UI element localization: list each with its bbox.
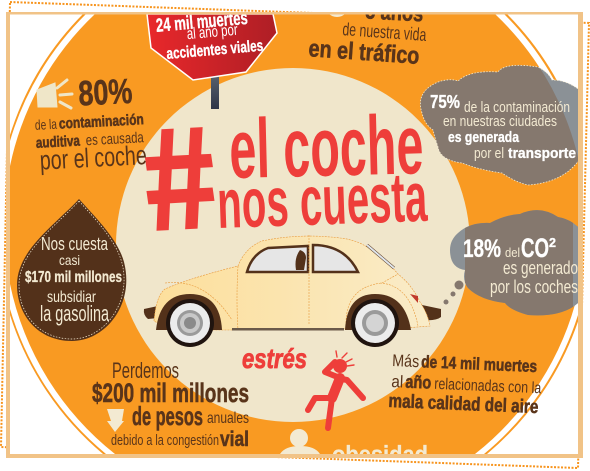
stress label: estrés: [242, 343, 307, 374]
central cream circle: [116, 68, 470, 422]
clock icon: [330, 14, 344, 17]
rear wheel arch: [345, 294, 411, 330]
cloud over white: [420, 65, 585, 185]
octagon: [147, 14, 277, 80]
air quality text: mala calidad del aire: [388, 391, 539, 418]
noise text: auditiva: [35, 133, 81, 152]
cloud: 18 percent: 2: [549, 235, 556, 250]
icon: person: [290, 429, 308, 447]
noise text: por el coche: [39, 140, 147, 176]
cloud: 75 percent: [420, 65, 585, 185]
air quality text: [388, 351, 543, 418]
obesity section: [280, 429, 428, 469]
congestion text: anuales: [207, 410, 249, 427]
icon: down arrow: [107, 409, 124, 432]
noise text: de la: [34, 116, 57, 133]
drop shape: [17, 199, 126, 341]
gasoline drop: [17, 199, 126, 341]
car: [144, 235, 441, 347]
front wheel: [166, 299, 214, 347]
cloud: 75 percent: por el: [474, 145, 504, 162]
cloud shape: [420, 65, 585, 185]
sign pole: [211, 76, 219, 109]
sign text: 24 mil muertes: [155, 8, 249, 37]
gasoline drop: subsidiar: [47, 289, 97, 306]
el coche: el coche: [228, 97, 424, 196]
cloud: 75 percent: transporte: [508, 145, 576, 162]
tail light: [410, 294, 418, 303]
cloud stitching: [420, 65, 585, 185]
icon: megaphone: [37, 80, 72, 108]
back glass: [367, 245, 394, 268]
gasoline drop: casi: [59, 252, 80, 268]
cloud text: 75%: [430, 92, 460, 112]
stop sign: [147, 7, 277, 109]
hash symbol: #: [133, 96, 226, 260]
noise stat: [35, 78, 146, 176]
years in traffic: [309, 14, 426, 64]
cloud edge: [450, 210, 585, 315]
rear window: [313, 245, 358, 272]
air quality text: año: [405, 372, 432, 393]
cloud shape: [465, 210, 573, 316]
congestion text: [92, 358, 249, 451]
sign text: [156, 14, 263, 60]
cloud text: 18%: [463, 235, 501, 263]
door and fender lines: [165, 235, 418, 330]
rear wheel: [351, 299, 399, 347]
car body: [154, 236, 430, 330]
cloud: 18 percent: del: [505, 245, 520, 260]
noise text: es causada: [85, 129, 145, 149]
years in traffic: en el tráfico: [308, 35, 420, 70]
smoke puffs: [444, 280, 464, 304]
congestion text: $200 mil millones: [92, 378, 249, 408]
driver silhouette: [296, 250, 306, 270]
air quality text: al: [391, 372, 404, 391]
noise text: 80%: [77, 72, 133, 114]
noise text: contaminación: [58, 111, 144, 133]
cloud: 18 percent: [450, 210, 585, 315]
sign text: al año por: [186, 22, 239, 43]
rear bumper: [422, 305, 441, 320]
congestion text: debido a la congestión: [111, 432, 219, 449]
title: [145, 114, 428, 231]
congestion text: Perdemos: [112, 358, 179, 383]
icon: stressed person: [308, 351, 363, 428]
cloud: 75 percent: en nuestras ciudades: [443, 113, 557, 130]
congestion text: vial: [220, 428, 249, 451]
front window: [247, 246, 308, 272]
drop text: Nos cuesta: [41, 234, 109, 254]
gasoline drop: la gasolina: [40, 301, 110, 326]
congestion text: de pesos: [132, 401, 203, 431]
obesity text: obesidad: [332, 441, 428, 469]
air quality text: Más: [392, 351, 420, 371]
noise text: [35, 78, 146, 176]
cloud: 75 percent: es generada: [448, 129, 520, 146]
years text: de nuestra vida: [342, 19, 428, 45]
air quality text: de 14 mil muertes: [421, 352, 538, 376]
gasoline drop: $170 mil millones: [25, 269, 122, 286]
front wheel arch: [156, 294, 222, 330]
front bumper: [144, 306, 158, 319]
cloud: 18 percent: CO: [521, 233, 549, 263]
nos cuesta: nos cuesta: [216, 158, 429, 243]
running board: [232, 328, 344, 330]
sign text: accidentes viales: [166, 38, 264, 63]
air quality text: relacionadas con la: [434, 376, 542, 397]
